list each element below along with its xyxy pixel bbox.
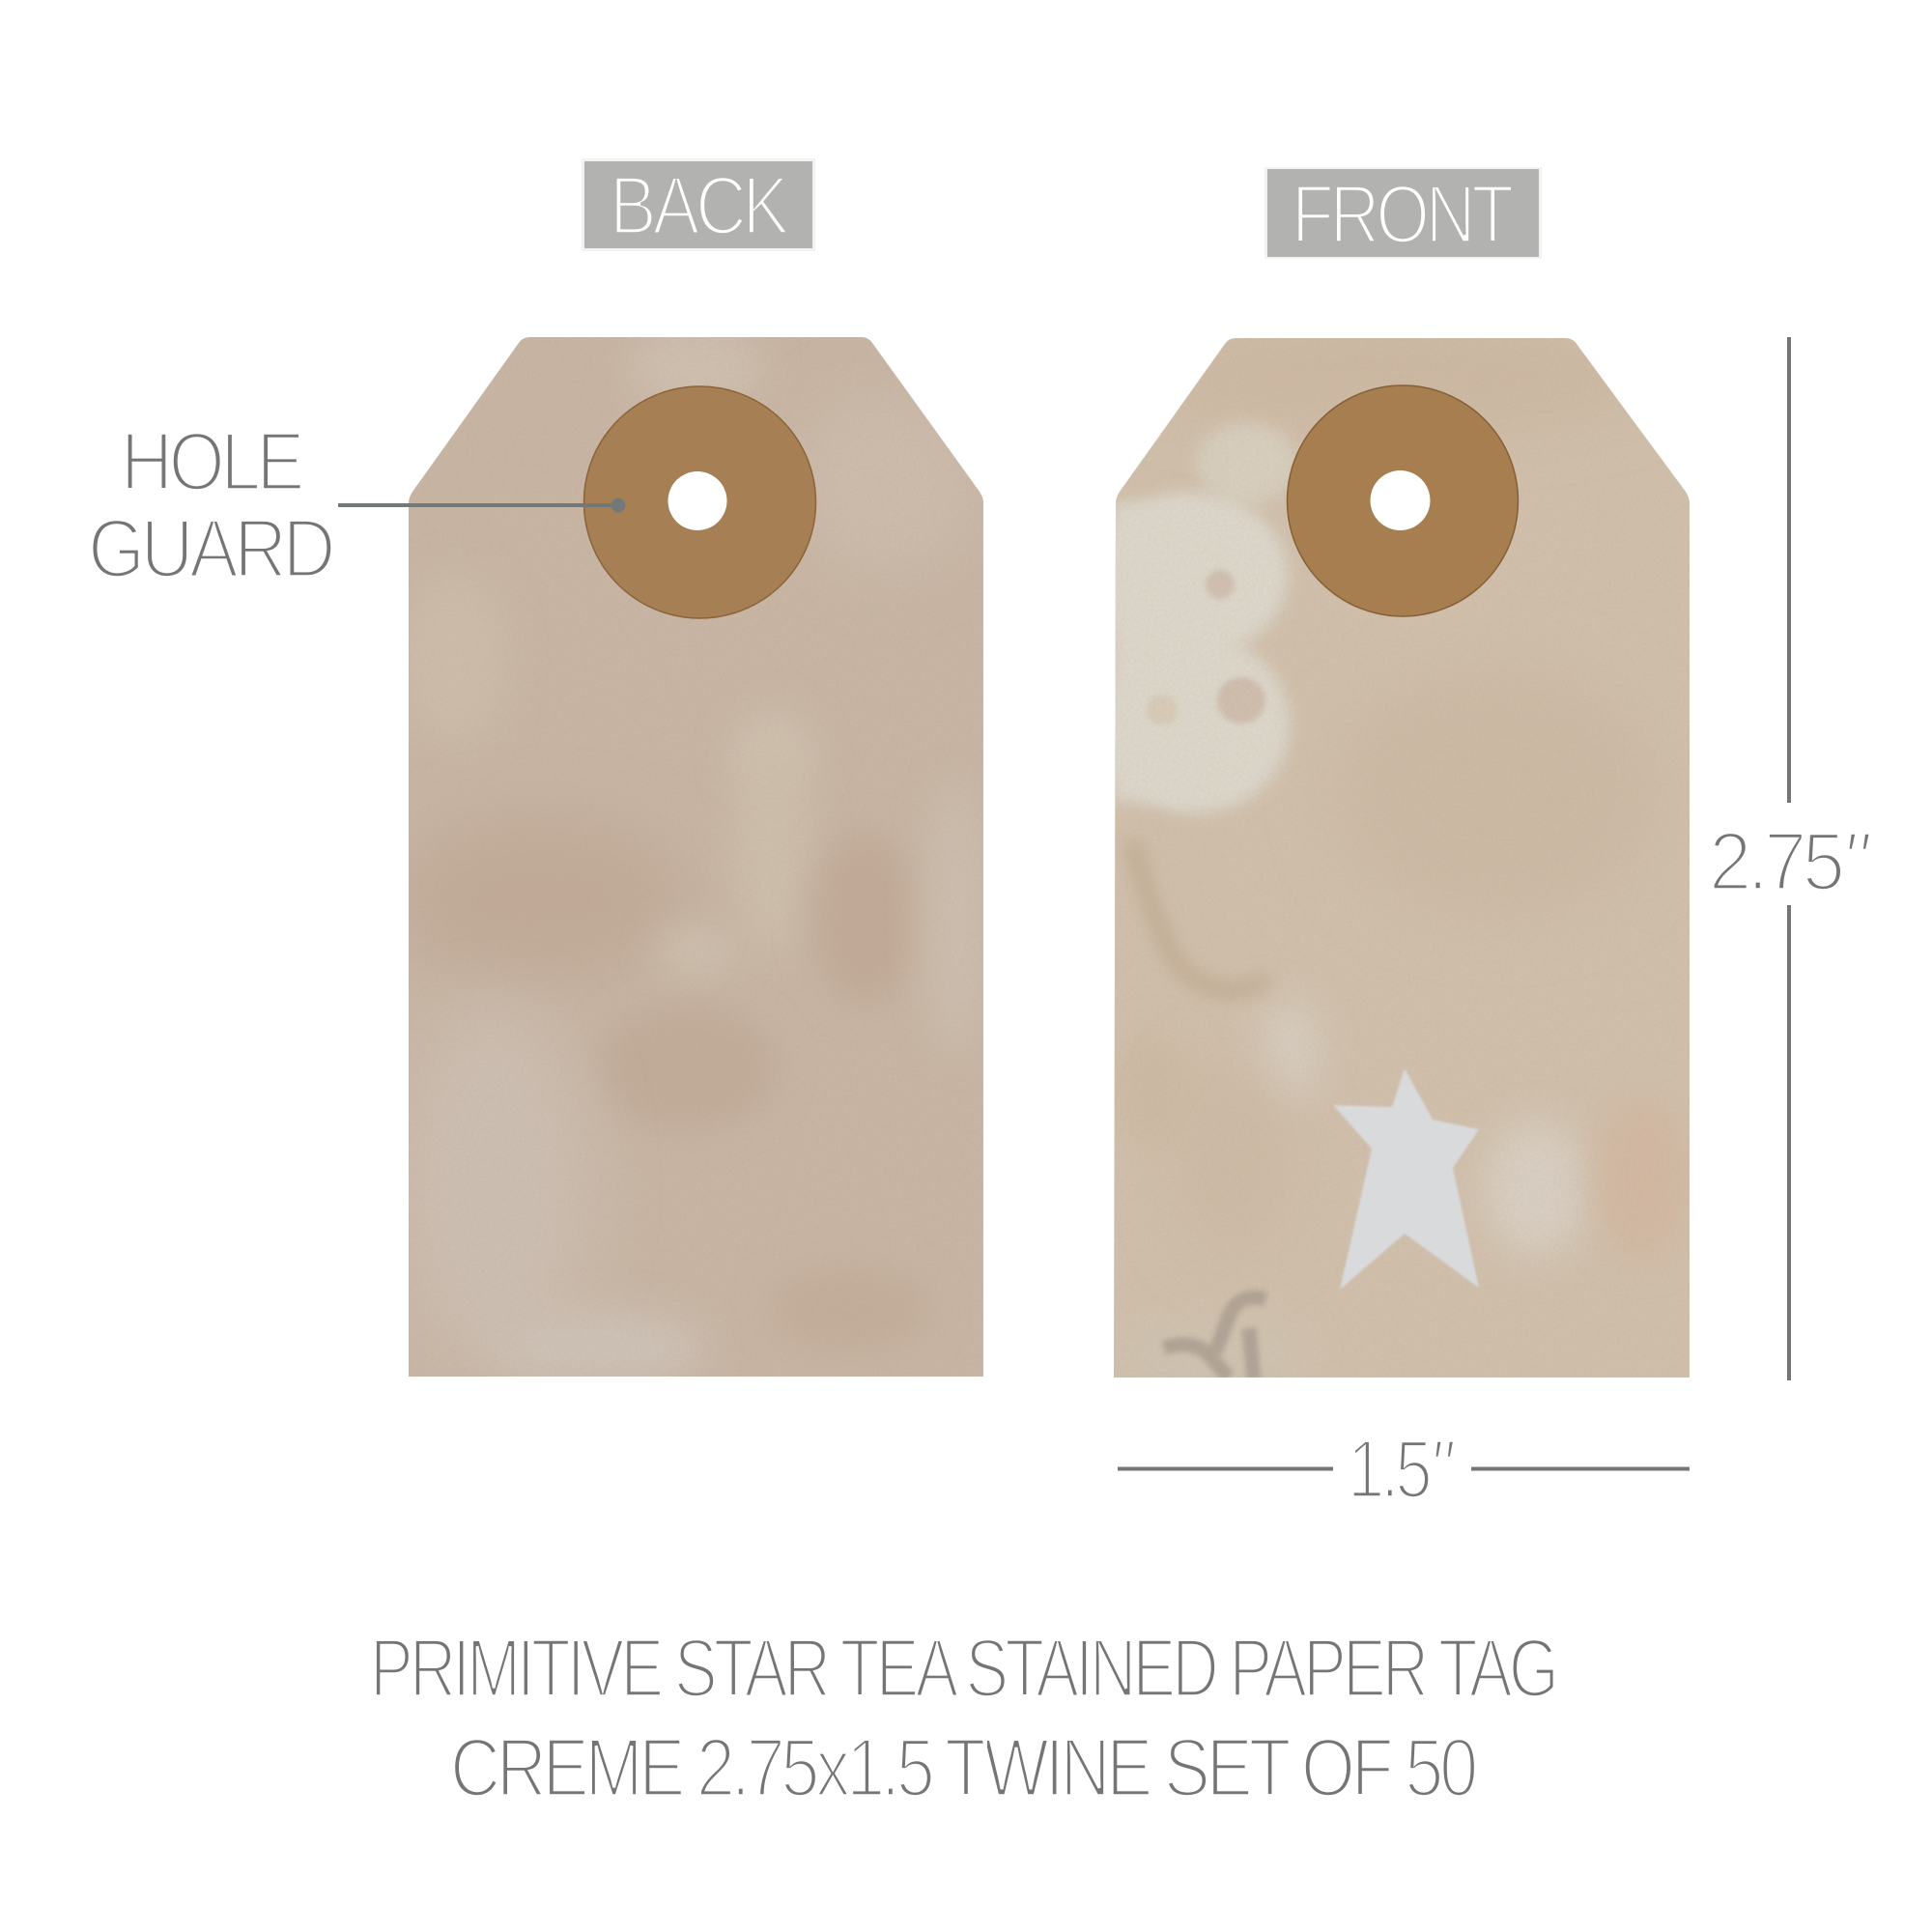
- title: [370, 1623, 1555, 1814]
- dimension: width: [1118, 1424, 1690, 1516]
- label: front: FRONT: [1292, 169, 1513, 261]
- dimension: height: 2.75": [1709, 816, 1871, 908]
- dimension: width: 1.5": [1348, 1424, 1455, 1516]
- back hole guard: [583, 386, 815, 618]
- front hole guard: [1287, 385, 1519, 616]
- icon: primitive star: [1333, 1068, 1479, 1290]
- back tag: [396, 328, 987, 1386]
- title: PRIMITIVE STAR TEA STAINED PAPER TAG: [370, 1623, 1555, 1715]
- callout: hole guard: HOLE: [121, 416, 302, 508]
- front punched hole: [1370, 470, 1430, 530]
- label: back: BACK: [610, 160, 789, 252]
- back punched hole: [668, 471, 726, 530]
- callout: hole guard: [88, 416, 626, 595]
- arrow: leader line: [338, 498, 626, 512]
- callout: hole guard: GUARD: [88, 503, 332, 595]
- front tag: [1098, 328, 1690, 1391]
- infographic canvas: [93, 158, 1868, 1795]
- dimension: height: [1709, 337, 1871, 1380]
- title: CREME 2.75x1.5 TWINE SET OF 50: [450, 1722, 1475, 1814]
